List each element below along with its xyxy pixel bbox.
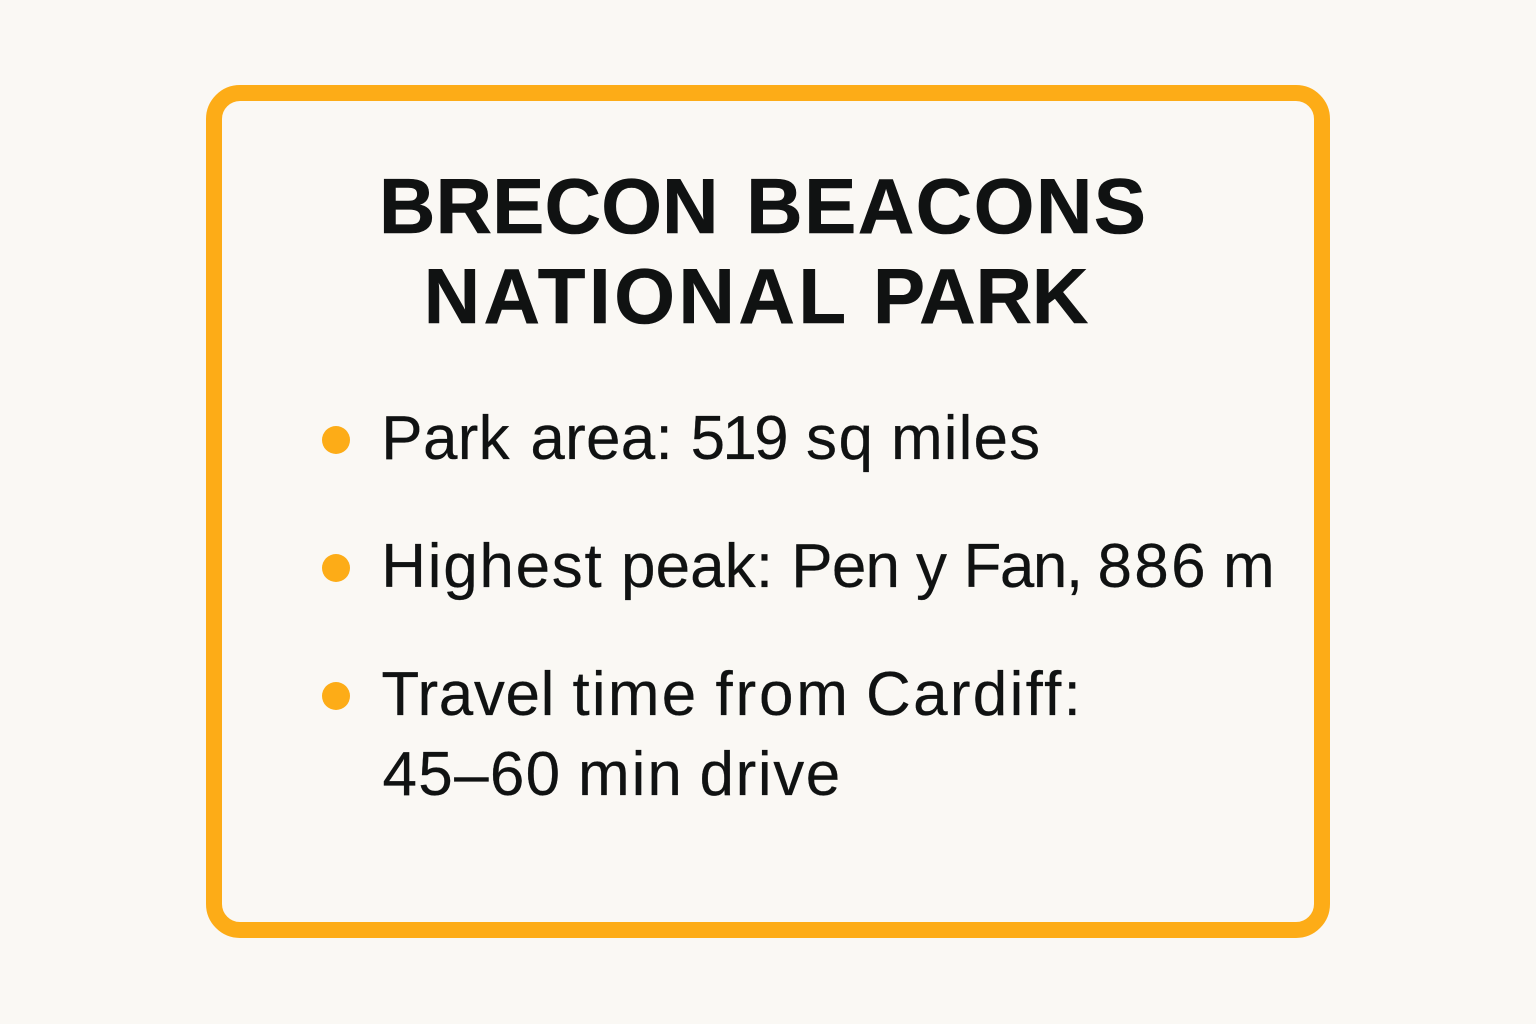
panel: park facts card	[206, 85, 1330, 938]
title: BRECON	[379, 162, 719, 250]
text: highest peak	[381, 532, 1275, 601]
text: park area: area:	[530, 404, 673, 473]
text: travel time: time	[572, 660, 698, 729]
bullet icon: highest peak	[322, 554, 350, 582]
text: park area: Park	[381, 404, 510, 473]
text: travel time: from	[716, 660, 851, 729]
text: highest peak: 886	[1098, 532, 1208, 601]
text: park area	[381, 404, 1041, 473]
title: BEACONS	[746, 162, 1148, 250]
bullet icon: travel time	[322, 682, 350, 710]
text: travel time: Travel	[381, 660, 555, 729]
text: travel time: 45–60	[382, 740, 561, 809]
title: PARK	[873, 252, 1088, 340]
title	[379, 162, 1148, 340]
text: travel time: min	[578, 740, 684, 809]
text: highest peak: Fan,	[964, 532, 1082, 601]
text: park area: 519	[691, 404, 786, 473]
text: travel time	[381, 660, 1083, 809]
text: highest peak: Highest	[381, 532, 603, 601]
text: travel time: drive	[700, 740, 842, 809]
title: NATIONAL	[424, 252, 850, 340]
text: park area: sq	[806, 404, 874, 473]
text: highest peak: y	[916, 532, 947, 601]
text: highest peak: m	[1223, 532, 1275, 601]
text: travel time: Cardiff:	[866, 660, 1083, 729]
bullet icon: park area	[322, 426, 350, 454]
text: park area: miles	[891, 404, 1041, 473]
text: highest peak: peak:	[621, 532, 773, 601]
text: highest peak: Pen	[791, 532, 899, 601]
